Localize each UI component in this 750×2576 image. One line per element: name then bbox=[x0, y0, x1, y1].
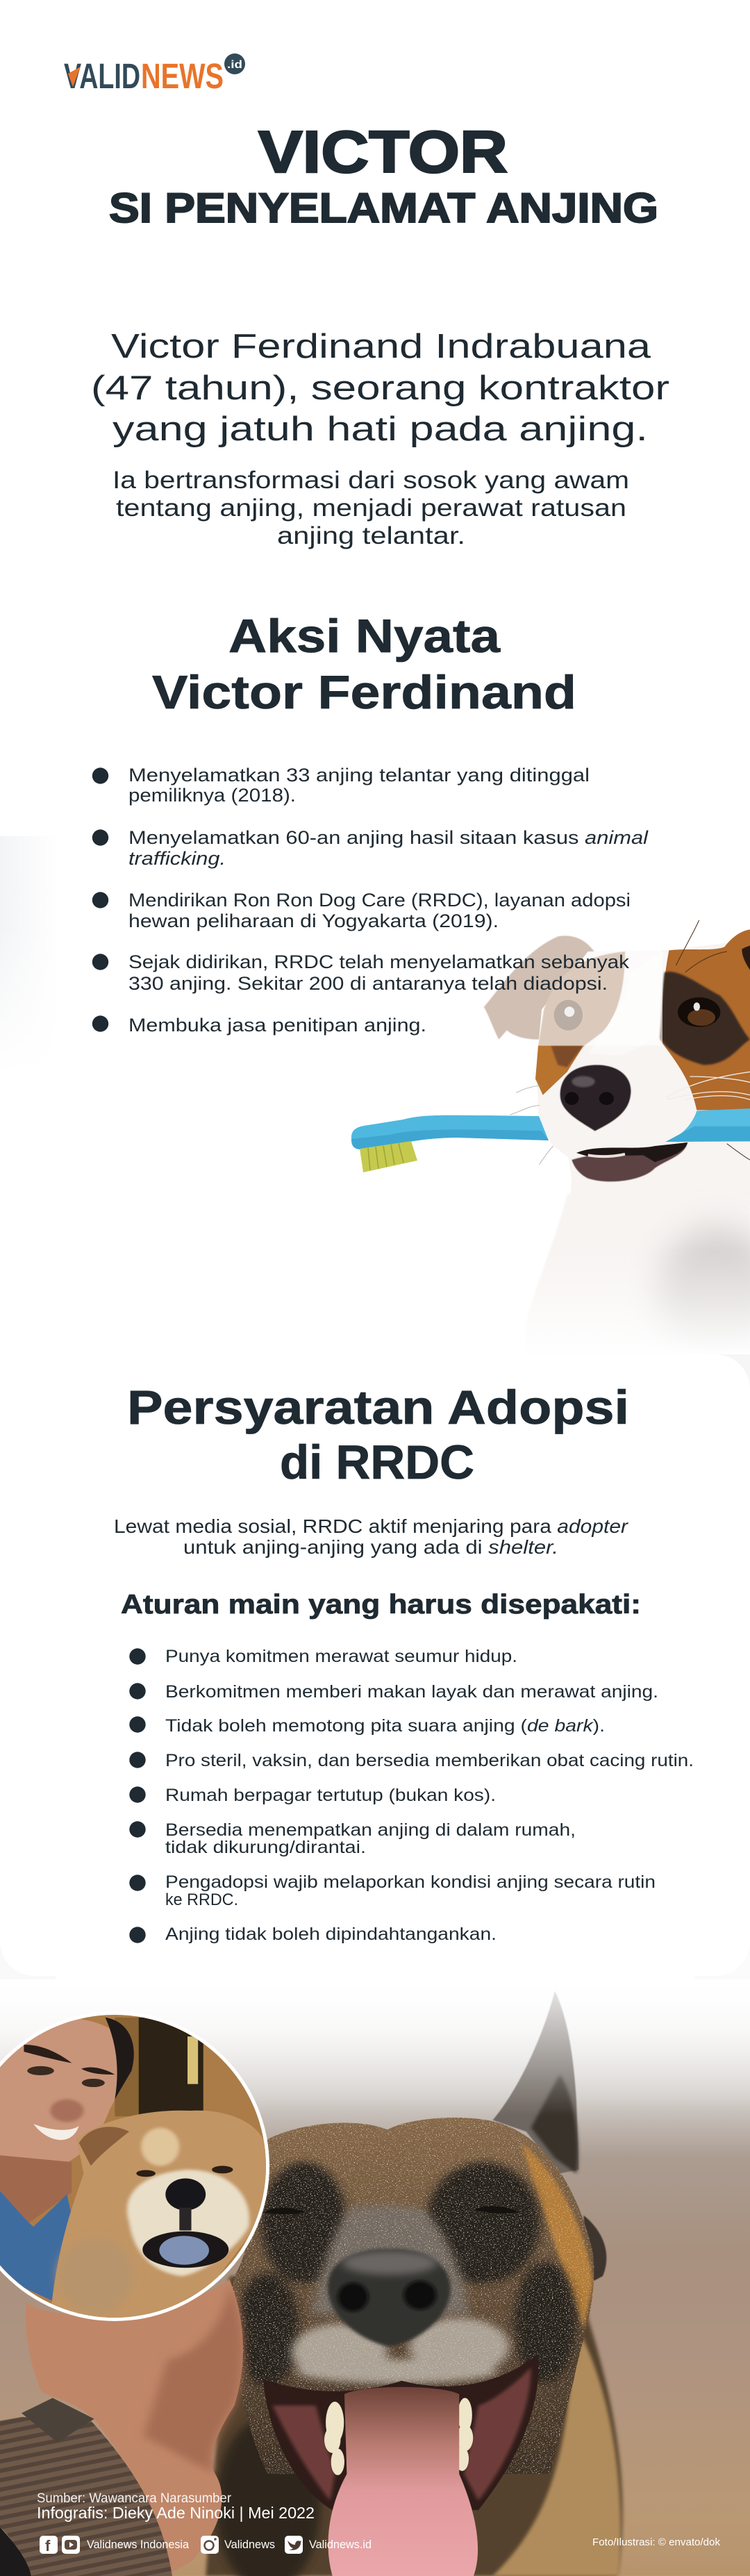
mouth bbox=[572, 1142, 688, 1181]
rule 5: Rumah berpagar tertutup (bukan kos). bbox=[165, 1786, 496, 1805]
dog neck bbox=[206, 2276, 622, 2576]
photo backdrop bbox=[0, 1979, 750, 2576]
rule 7: Pengadopsi wajib melaporkan kondisi anjing secara rutin bbox=[165, 1872, 656, 1892]
bullet 4 bbox=[92, 952, 630, 994]
photo credit: Foto/Ilustrasi: © envato/dok bbox=[592, 2536, 720, 2548]
photo: dog with toothbrush bbox=[351, 917, 750, 1380]
rule 7 bbox=[129, 1872, 656, 1909]
dog head with fur speckle bbox=[231, 2118, 594, 2474]
dark shape in corner bbox=[0, 2527, 31, 2576]
background: rounded panel for adoption requirements bbox=[0, 1354, 750, 1979]
bullet 3: hewan peliharaan di Yogyakarta (2019). bbox=[128, 911, 499, 931]
heading: Aksi Nyata: Victor Ferdinand bbox=[152, 666, 576, 719]
bullet 2 bbox=[92, 827, 649, 869]
intro headline: yang jatuh hati pada anjing. bbox=[112, 410, 648, 448]
title: VICTOR bbox=[258, 119, 508, 185]
portrait: Victor with his chow chow bbox=[0, 2010, 287, 2325]
background: faint grey fade behind the action list bbox=[0, 836, 59, 1073]
eyes bbox=[263, 2208, 306, 2214]
intro paragraph: anjing telantar. bbox=[277, 522, 465, 549]
adoption intro text: Lewat media sosial, RRDC aktif menjaring para adopter bbox=[114, 1515, 629, 1537]
head tan strip bbox=[522, 2143, 593, 2329]
dog body bbox=[526, 1148, 750, 1380]
bullet 3 bbox=[92, 890, 631, 931]
man neck and shirt bbox=[0, 2154, 72, 2223]
dog ear left bbox=[484, 936, 597, 1040]
icon: instagram bbox=[201, 2536, 219, 2554]
tongue bbox=[328, 2387, 478, 2576]
intro headline: Victor Ferdinand Indrabuana bbox=[111, 328, 651, 365]
credits bbox=[37, 2491, 315, 2522]
bullet 4: 330 anjing. Sekitar 200 di antaranya telah diadopsi. bbox=[128, 973, 608, 994]
icon: facebook: f bbox=[45, 2537, 51, 2554]
nose bbox=[560, 1065, 631, 1131]
rule 2: Berkomitmen memberi makan layak dan merawat anjing. bbox=[165, 1682, 658, 1702]
whiskers bbox=[667, 1072, 750, 1099]
text: Validnews.id: Validnews.id bbox=[309, 2538, 372, 2551]
dog head bbox=[537, 940, 750, 1206]
rule 6: Bersedia menempatkan anjing di dalam rumah, bbox=[165, 1820, 576, 1840]
list: adoption rules bbox=[129, 1647, 694, 1944]
adoption intro text bbox=[114, 1515, 629, 1558]
rule 8: Anjing tidak boleh dipindahtangankan. bbox=[165, 1925, 497, 1944]
heading: Persyaratan Adopsi: Persyaratan Adopsi bbox=[127, 1381, 629, 1434]
photo: happy shepherd dog with hand bbox=[0, 1979, 750, 2576]
bullet 2: trafficking. bbox=[128, 848, 226, 869]
rule 6 bbox=[129, 1820, 576, 1857]
bullet 1: Menyelamatkan 33 anjing telantar yang ditinggal bbox=[128, 765, 590, 786]
dog ear bbox=[492, 1991, 578, 2173]
wood background bbox=[0, 2015, 266, 2318]
overlay washing out the upper-left of the dog bbox=[456, 917, 662, 1046]
sleeve patch bbox=[22, 2398, 94, 2443]
bullet 5: Membuka jasa penitipan anjing. bbox=[128, 1015, 426, 1036]
toothbrush handle left bbox=[351, 1115, 549, 1149]
rule 1: Punya komitmen merawat seumur hidup. bbox=[165, 1647, 517, 1666]
icon: twitter bbox=[285, 2536, 303, 2554]
mouth bbox=[263, 2354, 539, 2510]
intro paragraph: tentang anjing, menjadi perawat ratusan bbox=[116, 495, 626, 522]
logo: .id bbox=[227, 59, 242, 71]
bullet 3: Mendirikan Ron Ron Dog Care (RRDC), layanan adopsi bbox=[128, 890, 631, 911]
sleeve bbox=[0, 2417, 172, 2576]
list: actions bbox=[92, 765, 649, 1036]
body shading bbox=[652, 1218, 750, 1332]
heading: Persyaratan Adopsi bbox=[127, 1381, 629, 1489]
rule 4: Pro steril, vaksin, dan bersedia memberikan obat cacing rutin. bbox=[165, 1751, 694, 1770]
rule 6: tidak dikurung/dirantai. bbox=[165, 1838, 366, 1857]
rule 7: ke RRDC. bbox=[165, 1891, 238, 1909]
rule 3: Tidak boleh memotong pita suara anjing ( de bark ). bbox=[165, 1716, 605, 1736]
social links bbox=[40, 2536, 372, 2554]
white fade at top of photo bbox=[0, 1979, 750, 2116]
teeth bbox=[324, 2398, 473, 2475]
logo: VALID bbox=[64, 56, 140, 96]
man bbox=[0, 2019, 117, 2161]
heading: Persyaratan Adopsi: di RRDC bbox=[280, 1436, 474, 1489]
credits: Infografis: Dieky Ade Ninoki | Mei 2022 bbox=[37, 2504, 315, 2522]
door handle bbox=[188, 2036, 198, 2084]
bullet 1 bbox=[92, 765, 590, 806]
intro headline bbox=[91, 328, 669, 448]
nose bbox=[328, 2249, 451, 2347]
toothbrush bristles bbox=[360, 1141, 417, 1172]
adoption intro text: untuk anjing-anjing yang ada di shelter. bbox=[183, 1536, 558, 1558]
fade at bottom of dog photo bbox=[500, 1250, 750, 1358]
hand bbox=[26, 2280, 243, 2575]
bullet 4: Sejak didirikan, RRDC telah menyelamatkan sebanyak bbox=[128, 952, 630, 972]
head shape bbox=[231, 2118, 594, 2474]
title: SI PENYELAMAT ANJING bbox=[109, 185, 658, 231]
chow chow bbox=[50, 2111, 270, 2324]
intro headline: (47 tahun), seorang kontraktor bbox=[91, 369, 669, 407]
dark eye patch bbox=[660, 972, 750, 1065]
muzzle fur bbox=[292, 2318, 510, 2384]
eye left bbox=[554, 1000, 583, 1031]
heading: Aksi Nyata: Aksi Nyata bbox=[228, 610, 501, 663]
text: Validnews Indonesia: Validnews Indonesia bbox=[87, 2538, 190, 2551]
toothbrush right handle bbox=[665, 1108, 750, 1142]
logo bbox=[64, 53, 245, 96]
face left patch bbox=[538, 952, 625, 1047]
heading: Aksi Nyata bbox=[152, 610, 576, 719]
dog ear right lower bbox=[583, 2216, 606, 2284]
credits: Sumber: Wawancara Narasumber bbox=[37, 2491, 232, 2506]
subheading: rules: Aturan main yang harus disepakati: bbox=[121, 1590, 641, 1620]
logo: NEWS bbox=[141, 56, 224, 96]
eye right bbox=[678, 997, 720, 1027]
text: Validnews: Validnews bbox=[224, 2538, 275, 2551]
bullet 1: pemiliknya (2018). bbox=[128, 785, 296, 806]
icon: facebook bbox=[40, 2536, 58, 2554]
dark mask bbox=[237, 2162, 576, 2386]
muzzle bridge bbox=[311, 2205, 469, 2314]
intro paragraph: Ia bertransformasi dari sosok yang awam bbox=[112, 467, 629, 494]
icon: youtube bbox=[62, 2536, 80, 2554]
blaze bbox=[588, 952, 669, 1056]
title bbox=[109, 119, 658, 231]
bullet 2: Menyelamatkan 60-an anjing hasil sitaan kasus animal bbox=[128, 827, 649, 848]
intro paragraph bbox=[112, 467, 629, 549]
face right brown bbox=[660, 929, 750, 1110]
